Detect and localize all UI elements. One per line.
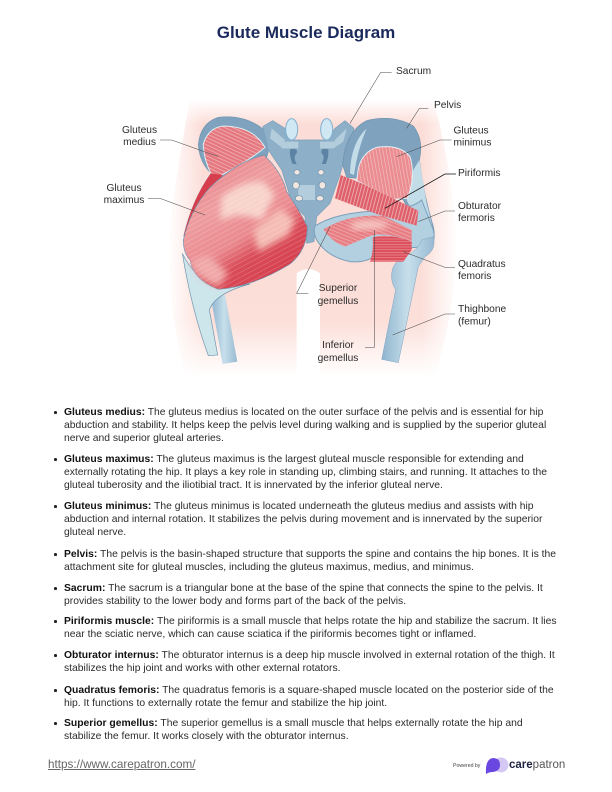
label: Gluteus minimus: minimus	[454, 138, 491, 148]
left femur	[211, 295, 237, 364]
gluteus maximus	[183, 155, 307, 289]
text block: Quadratus femoris: Quadratus femoris: The quadratus femoris is a square-shaped muscle located on the posterior side of the	[64, 685, 554, 696]
text block: Gluteus medius: Gluteus medius: The gluteus medius is located on the outer surface of the pelvis and is essential for hip	[64, 407, 543, 418]
text block: Pelvis	[64, 548, 594, 574]
text block: Sacrum: Sacrum: The sacrum is a triangular bone at the base of the spine that connects the spine to the pelvis. It	[64, 583, 543, 594]
text block: Obturator internus: stabilizes the hip joint and works with other external rotators.	[64, 663, 341, 674]
text block: Sacrum	[64, 582, 594, 608]
text block: Sacrum: provides stability to the lower body and forms part of the back of the pelvis.	[64, 596, 406, 607]
label: Inferior gemellus: Inferior	[322, 340, 354, 351]
footer: powered by: Powered by	[453, 763, 480, 769]
label: Inferior gemellus: gemellus	[318, 353, 358, 364]
footer: carepatron wordmark: carepatron	[509, 759, 565, 771]
label: Gluteus medius: medius	[123, 137, 156, 148]
label: Gluteus medius: Gluteus	[122, 125, 157, 136]
icon: carepatron logo	[486, 758, 508, 774]
label: Superior gemellus: gemellus	[318, 296, 358, 307]
text block: Gluteus maximus: externally rotating the hip. It plays a key role in standing up, climbing stairs, and running. It attaches to the	[64, 467, 547, 478]
text block: Gluteus maximus: Gluteus maximus: The gluteus maximus is the largest gluteal muscle responsible for extending and	[64, 454, 524, 465]
anatomical diagram	[104, 66, 506, 364]
text block: Gluteus medius: abduction and stability. It helps keep the pelvis level during walking and is supplied by the superior gluteal	[64, 420, 546, 431]
footer link: https://www.carepatron.com/	[48, 758, 195, 771]
right femur	[382, 237, 434, 363]
label: Quadratus femoris: Quadratus	[458, 259, 506, 270]
text block: Gluteus minimus: abduction and internal rotation. It stabilizes the pelvis during movement and is innervated by the superior	[64, 514, 542, 525]
text block: Gluteus medius	[64, 406, 594, 445]
text block: Superior gemellus: Superior gemellus: The superior gemellus is a small muscle that helps externally rotate the hip and	[64, 718, 523, 729]
iliotibial tract	[182, 253, 250, 356]
text block: Gluteus minimus: gluteal nerve.	[64, 527, 126, 538]
text block: Obturator internus	[64, 649, 594, 675]
text block: Obturator internus: Obturator internus: The obturator internus is a deep hip muscle involved in external rotation of the thigh. It	[64, 650, 555, 661]
right ischium and hip ring	[314, 200, 434, 262]
sacrum	[263, 119, 354, 243]
gluteus medius	[183, 126, 265, 237]
piriformis	[335, 175, 418, 226]
leader lines	[148, 72, 456, 347]
text block: Piriformis muscle: near the sciatic nerve, which can cause sciatica if the piriformis becomes tight or inflamed.	[64, 629, 476, 640]
skin silhouette	[170, 100, 455, 377]
label: Pelvis: Pelvis	[434, 100, 461, 111]
title: Glute Muscle Diagram	[217, 23, 395, 42]
text block: Gluteus medius: nerve and superior gluteal arteries.	[64, 433, 224, 444]
text block: Piriformis muscle	[64, 615, 594, 641]
text block: Gluteus minimus: Gluteus minimus: The gluteus minimus is located underneath the gluteus medius and assists with hip	[64, 501, 534, 512]
text block: Pelvis: attachment site for gluteal muscles, including the gluteus maximus, medius, and minimus.	[64, 562, 474, 573]
label: Quadratus femoris: femoris	[458, 271, 491, 282]
label: Obturator fermoris: Obturator	[458, 201, 501, 212]
label: Sacrum: Sacrum	[396, 66, 431, 77]
text block: Quadratus femoris	[64, 684, 594, 710]
right pelvis wing	[343, 118, 434, 247]
label: Gluteus maximus: maximus	[104, 195, 144, 206]
text block: Quadratus femoris: hip. It functions to externally rotate the femur and stabilize the hip joint.	[64, 698, 387, 709]
text block: Gluteus maximus	[64, 453, 594, 492]
text block: Gluteus minimus	[64, 500, 594, 539]
obturator	[323, 216, 412, 247]
label: Piriformis: Piriformis	[458, 168, 500, 179]
left pelvis wing	[198, 117, 269, 180]
text block: Pelvis: Pelvis: The pelvis is the basin-shaped structure that supports the spine and contains the hip bones. It is the	[64, 549, 556, 560]
gluteus minimus	[357, 147, 412, 199]
text block: Gluteus maximus: gluteal tuberosity and the iliotibial tract. It is innervated by the inferior gluteal nerve.	[64, 480, 443, 491]
label: Gluteus maximus: Gluteus	[106, 183, 142, 194]
label: Thighbone (femur): Thighbone	[458, 304, 506, 315]
label: Thighbone (femur): (femur)	[458, 316, 491, 328]
label: Obturator fermoris: fermoris	[458, 213, 495, 224]
text block: Superior gemellus	[64, 717, 594, 743]
text block: Superior gemellus: stabilize the femur. It works closely with the obturator internus.	[64, 731, 349, 742]
quadratus femoris	[370, 236, 412, 262]
label: Superior gemellus: Superior	[319, 283, 357, 294]
text block: Piriformis muscle: Piriformis muscle: The piriformis is a small muscle that helps rotate the hip and stabilize the sacrum. It lies	[64, 616, 557, 627]
label: Gluteus minimus: Gluteus	[454, 126, 489, 136]
